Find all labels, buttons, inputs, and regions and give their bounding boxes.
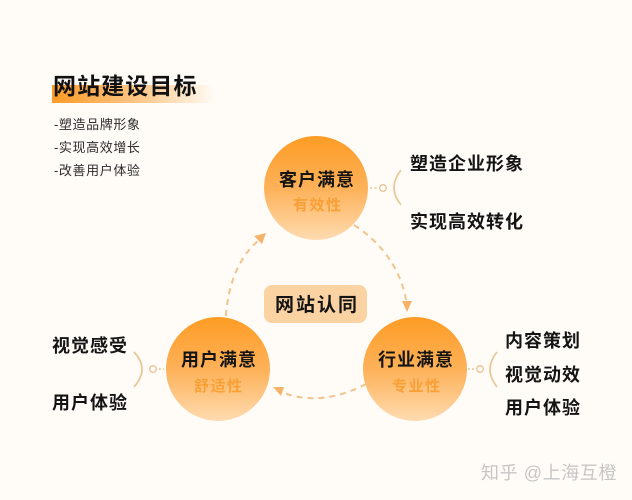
arrow: industry to user <box>273 384 366 398</box>
circle: customer satisfaction: 客户满意 <box>279 169 355 190</box>
text: customer details <box>410 153 524 232</box>
connector: industry <box>468 352 497 387</box>
center label <box>264 285 367 323</box>
text: industry details: 内容策划 <box>505 330 581 351</box>
circle: user satisfaction: 用户满意 <box>181 349 257 370</box>
arrow: user to customer <box>226 233 266 316</box>
text: user details: 视觉感受 <box>52 335 128 356</box>
circle: user satisfaction: 舒适性 <box>194 377 244 395</box>
watermark: 知乎 @上海互橙 <box>481 463 617 483</box>
circle: customer satisfaction <box>264 136 368 240</box>
text: industry details: 视觉动效 <box>505 365 581 385</box>
goals list: -塑造品牌形象 <box>54 117 141 132</box>
text: customer details: 实现高效转化 <box>410 211 524 232</box>
goals list: -实现高效增长 <box>54 140 141 155</box>
text: customer details: 塑造企业形象 <box>410 153 524 174</box>
circle: customer satisfaction: 有效性 <box>293 196 343 214</box>
text: user details: 用户体验 <box>52 392 128 413</box>
circle: industry satisfaction: 行业满意 <box>378 349 454 370</box>
title: 网站建设目标 <box>53 73 198 99</box>
goals list <box>54 117 141 178</box>
center label: 网站认同 <box>275 294 359 316</box>
circle: user satisfaction <box>166 317 270 421</box>
connector: customer <box>370 170 401 205</box>
goals list: -改善用户体验 <box>54 163 141 178</box>
text: industry details: 用户体验 <box>505 397 581 418</box>
circle: industry satisfaction <box>363 317 467 421</box>
text: user details <box>52 335 128 413</box>
arrow: customer to industry <box>354 225 412 312</box>
circle: industry satisfaction: 专业性 <box>392 377 442 395</box>
text: industry details <box>505 330 581 418</box>
connector: user <box>134 352 164 387</box>
